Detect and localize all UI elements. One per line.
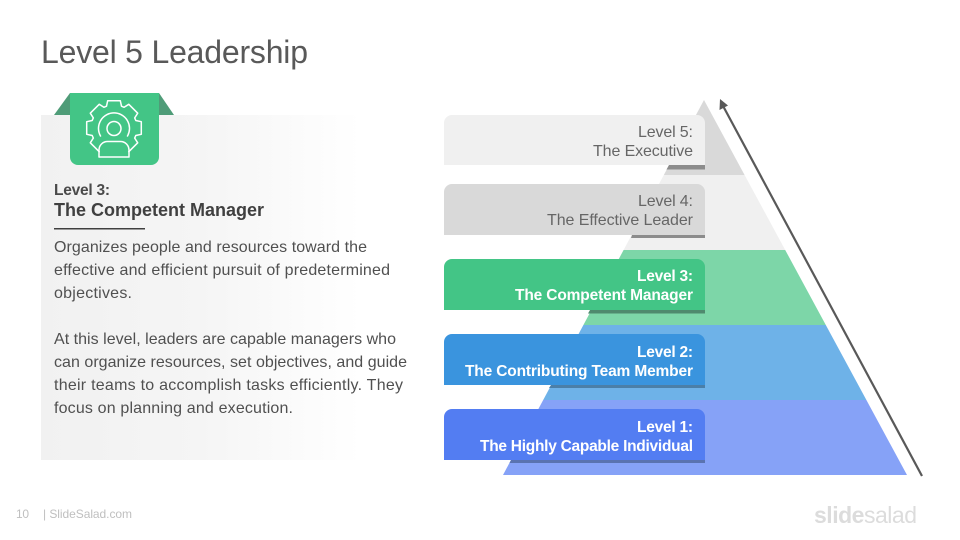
label: level 1 [444,409,705,463]
logo: slidesalad: slidesalad [814,502,917,528]
label: level 3 [444,259,705,314]
body text [54,239,407,417]
label: level 4: Level 4: [638,193,693,210]
label: level 2 [444,334,705,388]
body text: objectives. [54,285,132,302]
label: level 3: The Competent Manager [515,287,693,304]
label: level 5 [444,115,705,170]
body text: Organizes people and resources toward the [54,239,367,256]
body text: focus on planning and execution. [54,400,293,417]
pyramid chart [503,100,907,475]
label: level 5: The Executive [593,143,693,160]
body text: effective and efficient pursuit of predetermined [54,262,390,279]
footer: page number: 10 [16,507,29,521]
title: Level 5 Leadership [41,34,308,70]
panel: level detail [41,93,407,460]
body text: At this level, leaders are capable managers who [54,331,396,348]
body text: can organize resources, set objectives, and guide [54,354,407,371]
heading: level number: Level 3: [54,182,110,199]
label: level 4 [444,184,705,238]
icon: gear with person [87,101,141,157]
label: level 2: Level 2: [637,344,693,361]
ribbon tab folds [54,93,174,115]
panel background [41,115,361,460]
heading: level name: The Competent Manager [54,200,264,220]
label: level 1: The Highly Capable Individual [480,438,693,455]
label: level 3: Level 3: [637,268,693,285]
icon tab [70,93,159,165]
label: level 2: The Contributing Team Member [465,363,693,380]
label: level 4: The Effective Leader [547,212,694,229]
body text: their teams to accomplish tasks efficiently. They [54,377,403,394]
arrow: rising level [720,99,922,476]
footer: site name: | SlideSalad.com [43,507,132,521]
label: level 5: Level 5: [638,124,693,141]
label: level 1: Level 1: [637,419,693,436]
heading underline [54,228,145,230]
